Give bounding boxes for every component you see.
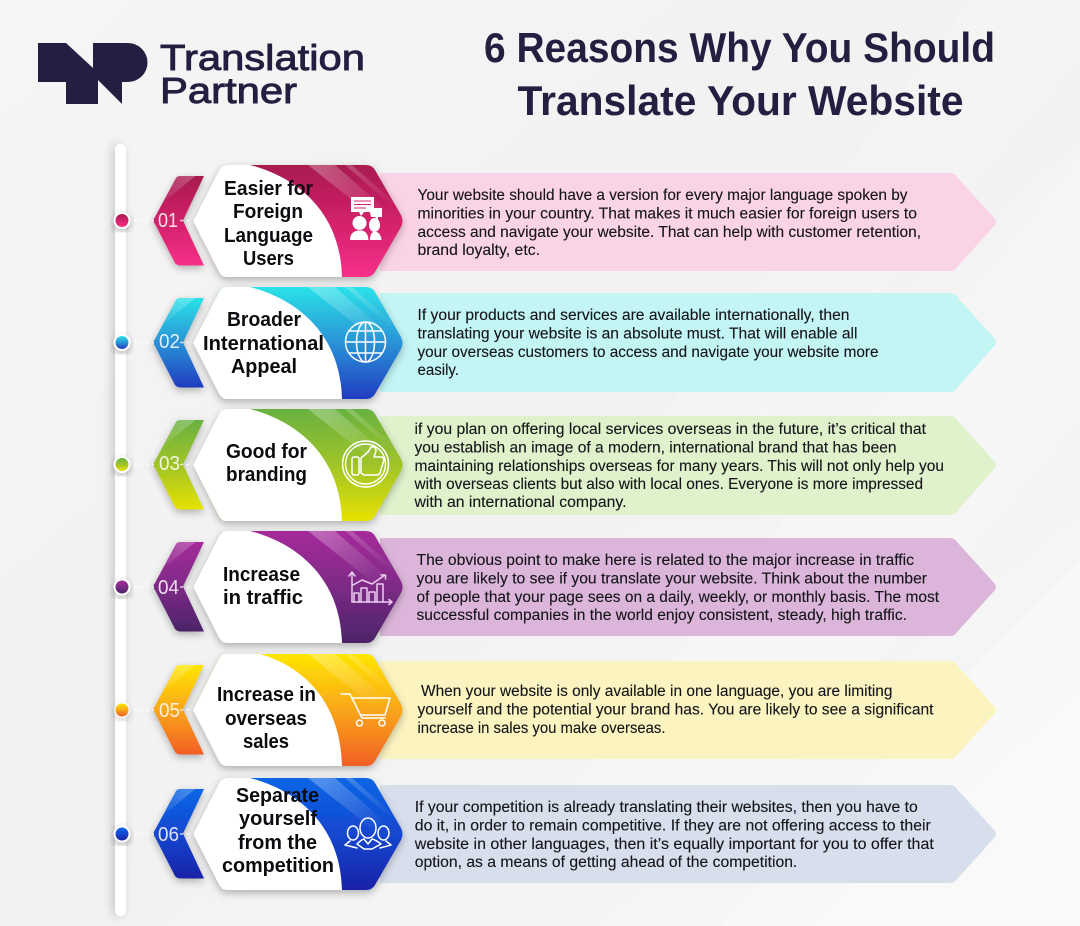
logo [38, 37, 365, 111]
panel: reason 1 text arrow [380, 173, 996, 271]
heading: reason 1: Language [224, 224, 313, 247]
timeline dot 05 [114, 702, 130, 718]
text block: reason 4: The obvious point to make here is related to the major increase in traffic [416, 552, 914, 569]
text block: reason 3: if you plan on offering local services overseas in the future, it’s critical that [414, 421, 927, 438]
panel: reason 3 text arrow [380, 416, 996, 515]
panel: reason 4 text arrow [380, 538, 996, 636]
heading: reason 6: from the [238, 831, 317, 854]
number 02: 02 [159, 331, 180, 353]
heading: reason 1: Foreign [233, 200, 303, 223]
text block: reason 6: website in other languages, then it’s equally important for you to offer that [414, 836, 935, 853]
timeline dot 04 [114, 578, 130, 596]
reason 3 graphic [114, 404, 415, 524]
text block: reason 1: access and navigate your website. That can help with customer retention, [418, 224, 921, 241]
text block: reason 6: do it, in order to remain competitive. If they are not offering access to their [415, 818, 931, 834]
icon: globe [346, 322, 386, 362]
text block: reason 2: translating your website is an absolute must. That will enable all [418, 326, 858, 342]
reason 4 graphic [114, 526, 415, 646]
heading: reason 6: competition [222, 854, 334, 877]
title: Translate Your Website [518, 77, 964, 124]
text block: reason 5: yourself and the potential your brand has. You are likely to see a significant [418, 702, 934, 718]
logo mark [38, 43, 148, 104]
text block: reason 2 [418, 307, 878, 379]
heading: reason 1 [224, 177, 313, 270]
reason 1 graphic [114, 160, 415, 280]
text block: reason 2: If your products and services are available internationally, then [418, 307, 850, 324]
heading: reason 3 [226, 440, 307, 486]
heading: reason 3: Good for [226, 440, 307, 463]
heading: reason 5: overseas [225, 707, 307, 730]
heading: reason 5: Increase in [217, 683, 316, 706]
text block: reason 1: minorities in your country. That makes it much easier for foreign users to [418, 206, 917, 222]
icon: growth chart [349, 572, 392, 604]
number chevron 05 [150, 664, 206, 762]
number chevron 04 [150, 540, 206, 639]
logo wordmark: Translation [160, 37, 365, 78]
hexagon 03 [185, 404, 415, 524]
text block: reason 4: you are likely to see if you translate your website. Think about the number [416, 570, 927, 588]
heading: reason 6 [222, 784, 334, 877]
heading: reason 1: Easier for [224, 177, 313, 200]
heading: reason 6: yourself [239, 807, 317, 830]
number chevron 06 [150, 788, 206, 886]
connector dashes [134, 220, 192, 834]
text block: reason 3: maintaining relationships overseas for many years. This will not only help you [414, 458, 944, 475]
heading: reason 4: Increase [223, 563, 300, 586]
text block: reason 6: If your competition is already translating their websites, then you have to [415, 799, 918, 816]
icon: group of people [345, 818, 391, 849]
text block: reason 4: successful companies in the world enjoy consistent, steady, high traffic. [416, 607, 907, 624]
reason 2 graphic [114, 282, 415, 402]
reason 5 graphic [114, 649, 415, 769]
number 03: 03 [159, 453, 180, 475]
heading: reason 5: sales [243, 730, 289, 753]
number 05: 05 [159, 700, 180, 722]
logo wordmark [160, 37, 365, 111]
heading: reason 6: Separate [236, 784, 319, 807]
text block: reason 5 [418, 683, 934, 737]
panel: reason 6 text arrow [380, 785, 996, 883]
heading: reason 2: International [203, 332, 324, 355]
text block: reason 3: with an international company. [413, 494, 626, 511]
panel: reason 2 text arrow [380, 293, 996, 392]
number chevron 01 [150, 174, 206, 273]
heading: reason 3: branding [226, 463, 307, 486]
title: 6 Reasons Why You Should [484, 24, 995, 71]
heading: reason 1: Users [243, 247, 294, 270]
text block: reason 5: When your website is only available in one language, you are limiting [421, 683, 892, 700]
heading: reason 5 [217, 683, 316, 753]
text block: reason 4: of people that your page sees on a daily, weekly, or monthly basis. The most [416, 589, 940, 606]
text block: reason 1: Your website should have a version for every major language spoken by [418, 187, 908, 204]
timeline dot 06 [114, 826, 130, 842]
text block: reason 6 [414, 799, 935, 871]
heading: reason 2 [203, 308, 324, 378]
hexagon 04 [185, 526, 415, 646]
hexagon 01 [185, 160, 415, 280]
icon: thumbs up [342, 441, 388, 487]
reason 6 graphic [114, 773, 415, 893]
logo wordmark: Partner [160, 70, 297, 111]
heading: reason 4: in traffic [223, 586, 303, 609]
heading: reason 2: Appeal [231, 355, 297, 378]
number chevron 03 [150, 418, 206, 517]
timeline bar [115, 144, 126, 916]
number chevron 02 [150, 296, 206, 395]
text block: reason 3 [413, 421, 944, 511]
text block: reason 5: increase in sales you make overseas. [418, 720, 666, 737]
number 06: 06 [158, 824, 179, 846]
icon: conversation [350, 197, 382, 240]
text block: reason 1 [418, 187, 921, 259]
number 01: 01 [158, 210, 178, 232]
text block: reason 3: you establish an image of a modern, international brand that has been [414, 440, 896, 456]
hexagon 02 [185, 282, 415, 402]
hexagon 06 [185, 773, 415, 893]
title [484, 24, 995, 124]
text block: reason 2: your overseas customers to access and navigate your website more [418, 344, 878, 361]
timeline dot 02 [114, 334, 130, 351]
number 04: 04 [158, 577, 179, 599]
hexagon 05 [185, 649, 415, 769]
timeline dot 03 [114, 456, 130, 473]
timeline dot 01 [114, 212, 130, 229]
icon: shopping cart [341, 694, 390, 726]
text block: reason 3: with overseas clients but also with local ones. Everyone is more impressed [414, 476, 923, 493]
text block: reason 4 [416, 552, 940, 624]
text block: reason 6: option, as a means of getting ahead of the competition. [415, 854, 797, 871]
text block: reason 1: brand loyalty, etc. [418, 242, 540, 259]
panel: reason 5 text arrow [380, 661, 996, 759]
heading: reason 4 [223, 563, 303, 609]
heading: reason 2: Broader [227, 308, 301, 331]
text block: reason 2: easily. [418, 362, 459, 379]
